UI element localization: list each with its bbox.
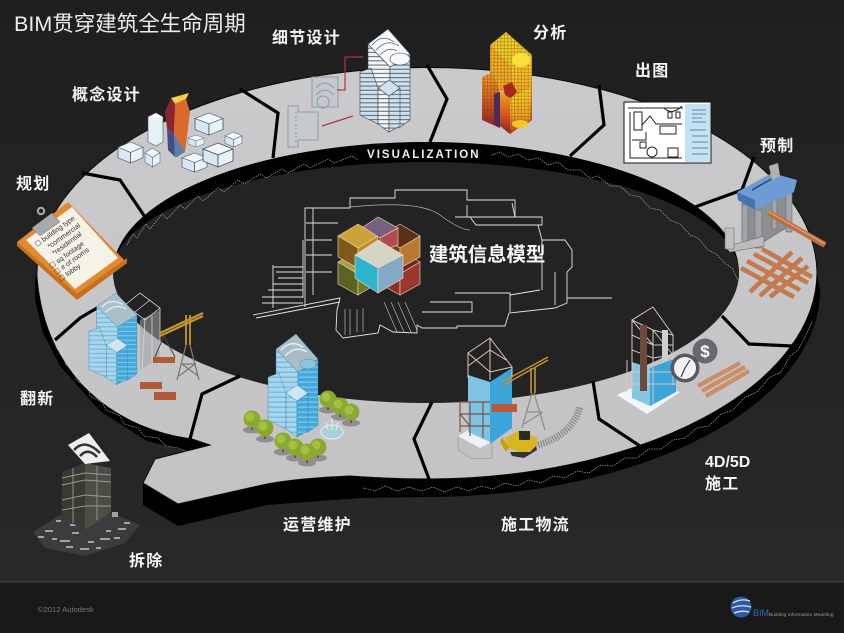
checklist text: *residential (51, 231, 84, 257)
cube: purple (363, 217, 398, 252)
hanging and stacked bricks (140, 357, 176, 400)
clipboard clip (32, 208, 60, 236)
stage: planning clipboard (17, 202, 127, 300)
ops tower (268, 334, 318, 437)
scaffold (468, 338, 512, 380)
stage: detail design drawings (288, 29, 410, 147)
lumber stack (741, 249, 812, 297)
label: 运营维护: 运营维护 (283, 515, 352, 534)
pale scaffold behind tower (125, 293, 160, 370)
label: 概念设计: 概念设计 (72, 85, 141, 104)
label: 拆除: 拆除 (129, 551, 163, 570)
checklist text: ☐ # of rooms (53, 246, 91, 277)
label: 规划: 规划 (16, 175, 50, 193)
renovation tower (89, 293, 137, 385)
logo globe (730, 596, 752, 618)
grey ring surface (37, 67, 817, 504)
label: 翻新: 翻新 (20, 389, 54, 408)
sheet schedule lines (690, 110, 708, 154)
label: 4D/5D 施工: 施工 (705, 475, 739, 493)
planks (698, 363, 749, 396)
centre label: 建筑信息模型 (429, 243, 545, 266)
stage labels (16, 23, 794, 570)
machine frame (725, 180, 792, 252)
centre hole (113, 162, 739, 403)
trees (243, 390, 360, 466)
rubble pile (33, 513, 140, 556)
bulldozer (500, 430, 537, 458)
logo wordmark: BIM (753, 608, 769, 618)
checklist text (33, 214, 102, 283)
label: 出图: 出图 (635, 62, 669, 80)
cube: olive (338, 250, 378, 295)
label: 4D/5D 施工: 4D/5D (705, 454, 750, 471)
plan drawing (288, 106, 318, 147)
label: 分析: 分析 (533, 23, 567, 42)
clock (670, 354, 700, 382)
stage: operation and maintenance (243, 334, 360, 466)
footer band (0, 581, 844, 633)
inner black wall (113, 142, 739, 402)
stage: analysis heat tower (482, 32, 532, 134)
label: 细节设计: 细节设计 (272, 29, 341, 47)
stage: construction logistics (458, 338, 580, 459)
brown core and scaffold (627, 307, 676, 404)
machine blue head (737, 173, 797, 210)
crane load (492, 404, 517, 412)
red leader lines (322, 57, 363, 126)
label: 施工物流: 施工物流 (501, 515, 570, 534)
lifecycle ring (35, 67, 820, 526)
tall white mass (148, 113, 163, 146)
central wireframe model (253, 190, 612, 338)
machine motor (769, 163, 780, 180)
white wireframe tower (360, 29, 410, 132)
checklist text: ☐ sq footage (48, 240, 86, 270)
ring band label: VISUALIZATION (367, 149, 481, 161)
model cube cluster (338, 217, 420, 295)
white base slab (617, 384, 680, 414)
stage: concept design massing (118, 93, 242, 172)
checklist text: *commercial (47, 222, 82, 251)
dollar badge: $ (700, 342, 710, 361)
stage: documentation sheet (624, 102, 711, 163)
sheet schedule panel (685, 104, 710, 162)
logo tagline: Building Information Modeling (769, 612, 834, 618)
sheet floor plan (628, 106, 683, 158)
stage: 4D/5D construction (617, 307, 749, 414)
fountain (321, 418, 343, 439)
checklist text: ☐ building type (33, 214, 77, 249)
blue lower body (632, 362, 650, 406)
copper rail (769, 212, 825, 245)
checklist text: ☐ lobby (57, 262, 83, 283)
clipboard board (17, 202, 127, 300)
coloured concept tower (165, 93, 190, 157)
title: BIM贯穿建筑全生命周期 (14, 12, 246, 36)
BIM logo (730, 596, 834, 618)
lower left scaffold (460, 402, 490, 438)
copyright: ©2012 Autodesk (38, 605, 94, 614)
label: 预制: 预制 (760, 137, 794, 155)
elevation drawing (312, 77, 338, 108)
ruined tower (62, 463, 111, 530)
blue body (468, 375, 490, 442)
outer black wall of ring (35, 272, 820, 526)
stage: demolition (33, 433, 140, 556)
cube: yellow (338, 224, 378, 268)
broken crown (68, 433, 110, 464)
wavy lines on ring walls (50, 152, 812, 492)
label: 4D/5D 施工 (705, 454, 750, 493)
cube: cyan centre (355, 240, 403, 293)
stage: renovation (89, 293, 203, 400)
segment dividers (55, 65, 792, 479)
cube: brown (380, 224, 420, 268)
trailer (458, 430, 492, 459)
curved track (538, 407, 580, 445)
crane (155, 313, 203, 380)
cube: dark red (380, 250, 420, 295)
clipboard paper (26, 207, 118, 289)
stage: prefabrication machine (725, 163, 825, 297)
crane (502, 357, 548, 393)
